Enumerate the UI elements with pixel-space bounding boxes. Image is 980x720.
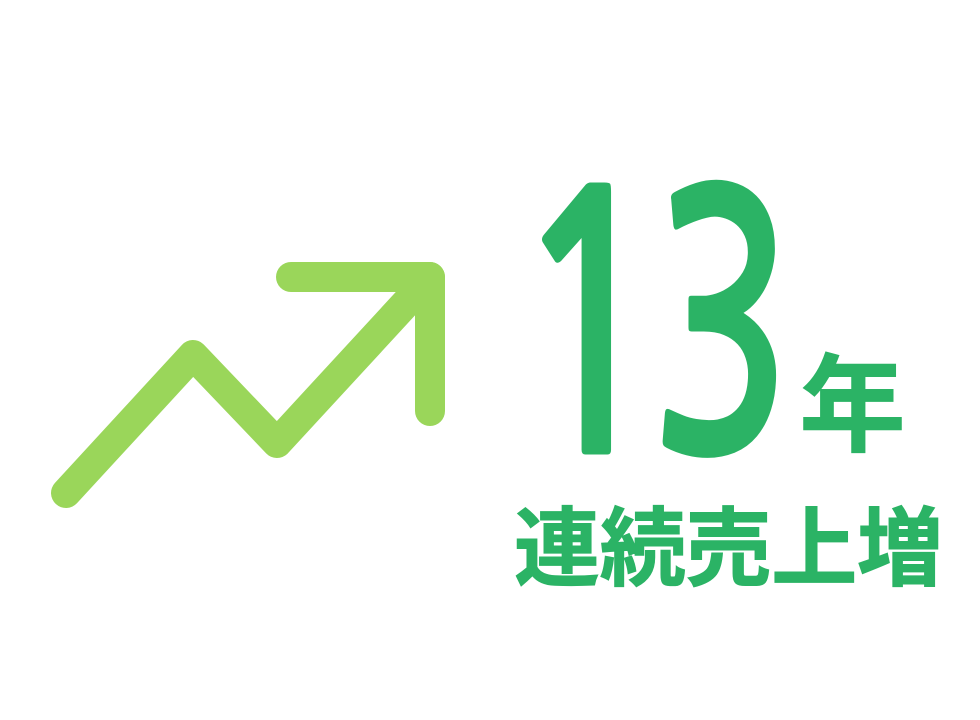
number: 13: 1 (507, 152, 674, 507)
icon: rising arrow (66, 277, 430, 493)
caption: 連続売上増: 連続売上増 (514, 502, 943, 598)
number: 13 (507, 152, 796, 508)
number: 13: 3 (648, 153, 796, 508)
unit: 年: 年 (800, 348, 906, 466)
